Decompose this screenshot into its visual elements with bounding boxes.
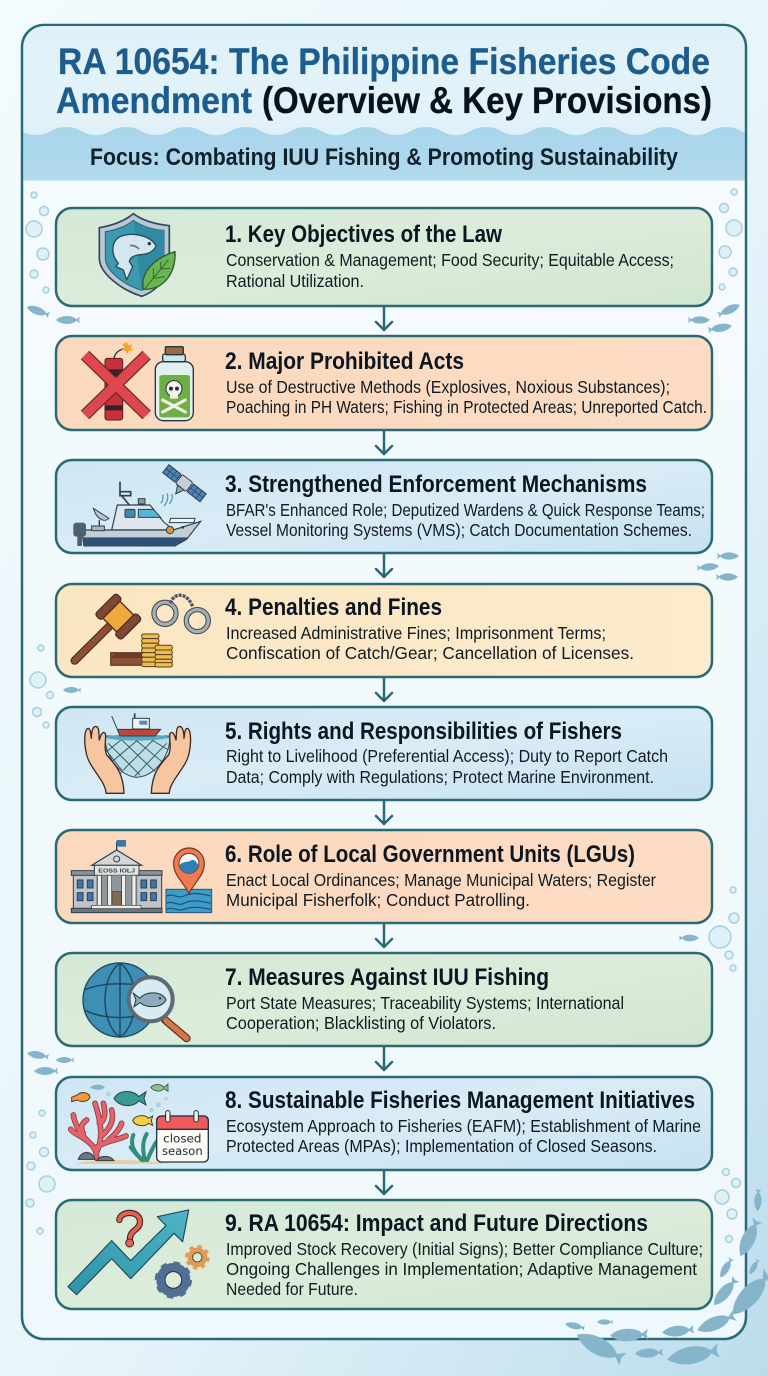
- body text: Port State Measures; Traceability Systems; International: [226, 993, 624, 1013]
- icon: globe and magnifier with fish: [83, 963, 187, 1038]
- panel 3: enforcement: [56, 460, 712, 553]
- icon: patrol boat and satellite: [73, 464, 207, 546]
- icon: gavel, handcuffs and coins: [75, 593, 208, 667]
- body text: Increased Administrative Fines; Imprisonment Terms;: [226, 623, 606, 643]
- panel 4: penalties: [56, 584, 712, 677]
- icon: coral reef and closed season calendar: closed: [163, 1132, 201, 1146]
- body text: Poaching in PH Waters; Fishing in Protected Areas; Unreported Catch.: [226, 397, 707, 417]
- heading: 4. Penalties and Fines: [225, 594, 442, 621]
- body text: Ecosystem Approach to Fisheries (EAFM); Establishment of Marine: [226, 1116, 701, 1136]
- body text: Cooperation; Blacklisting of Violators.: [226, 1013, 496, 1033]
- body text: Enact Local Ordinances; Manage Municipal Waters; Register: [226, 870, 656, 890]
- icon: crossed dynamite and poison bottle: [85, 342, 193, 421]
- body text: Conservation & Management; Food Security; Equitable Access;: [226, 250, 674, 270]
- icon: municipal hall and map pin over water: [71, 840, 212, 913]
- header block: [0, 26, 756, 181]
- title: RA 10654: The Philippine Fisheries Code: [58, 41, 710, 82]
- body text: Needed for Future.: [226, 1279, 358, 1299]
- heading: 7. Measures Against IUU Fishing: [225, 964, 549, 991]
- heading: 1. Key Objectives of the Law: [225, 221, 503, 248]
- body text: Use of Destructive Methods (Explosives, Noxious Substances);: [226, 377, 670, 397]
- title: Amendment: [56, 80, 252, 121]
- body text: Protected Areas (MPAs); Implementation of Closed Seasons.: [226, 1136, 657, 1156]
- subtitle: Focus: Combating IUU Fishing & Promoting Sustainability: [90, 144, 678, 171]
- panel 5: rights of fishers: [56, 707, 712, 800]
- icon: municipal hall and map pin over water: EOSS IOLJ: [98, 869, 135, 875]
- heading: 8. Sustainable Fisheries Management Initiatives: [225, 1087, 695, 1114]
- title: (Overview & Key Provisions): [262, 80, 712, 121]
- panel 7: IUU measures: [56, 953, 712, 1046]
- decorative bubbles: [26, 189, 742, 1242]
- icon: coral reef and closed season calendar: [71, 1084, 208, 1164]
- body text: Ongoing Challenges in Implementation; Adaptive Management: [226, 1259, 697, 1279]
- panel 6: LGUs: [56, 830, 712, 923]
- icon: rising arrow, question mark and gears: [68, 1210, 208, 1297]
- panel 1: key objectives: [56, 208, 712, 306]
- heading: 9. RA 10654: Impact and Future Directions: [225, 1210, 648, 1237]
- decorative fish: [25, 301, 768, 1368]
- heading: 6. Role of Local Government Units (LGUs): [225, 841, 635, 868]
- arrows between panels: [376, 307, 392, 1194]
- heading: 2. Major Prohibited Acts: [225, 348, 464, 375]
- body text: Confiscation of Catch/Gear; Cancellation of Licenses.: [226, 643, 634, 663]
- panel 8: sustainable management: [56, 1077, 712, 1170]
- body text: Data; Comply with Regulations; Protect Marine Environment.: [226, 767, 654, 787]
- body text: Right to Livelihood (Preferential Access); Duty to Report Catch: [226, 746, 668, 766]
- panel 9: impact and future: [56, 1200, 712, 1309]
- heading: 3. Strengthened Enforcement Mechanisms: [225, 471, 647, 498]
- panel 2: prohibited acts: [56, 336, 712, 430]
- icon: hands holding net and boat: [85, 713, 191, 793]
- icon: coral reef and closed season calendar: season: [162, 1144, 203, 1158]
- body text: Vessel Monitoring Systems (VMS); Catch Documentation Schemes.: [226, 520, 692, 540]
- icon: shield with fish and leaf: [99, 214, 175, 296]
- body text: Municipal Fisherfolk; Conduct Patrolling.: [226, 890, 530, 910]
- body text: Improved Stock Recovery (Initial Signs); Better Compliance Culture;: [226, 1239, 703, 1259]
- body text: BFAR's Enhanced Role; Deputized Wardens & Quick Response Teams;: [226, 500, 705, 520]
- heading: 5. Rights and Responsibilities of Fishers: [225, 718, 622, 745]
- body text: Rational Utilization.: [226, 271, 364, 291]
